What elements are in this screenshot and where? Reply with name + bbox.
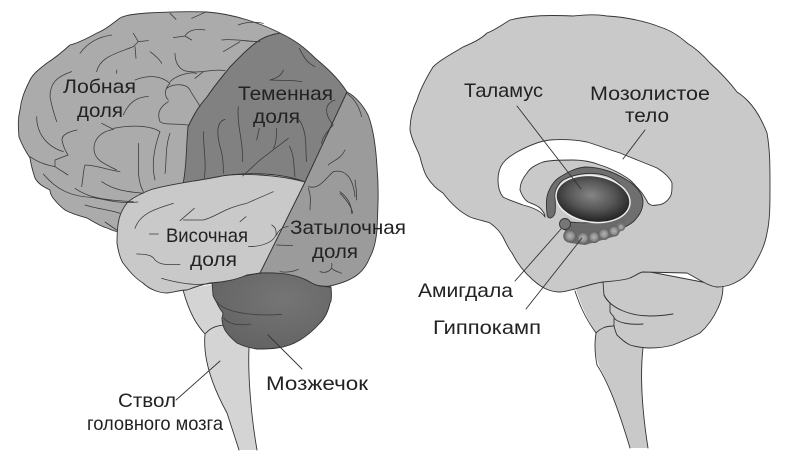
pointer: corpus callosum [623, 130, 645, 159]
cerebellum folds: right [604, 295, 673, 324]
thalamus [552, 170, 634, 228]
label: temporal lobe: доля [190, 249, 237, 271]
pointer: brainstem [176, 361, 220, 400]
label: occipital lobe: Затылочная [290, 217, 406, 239]
cerebellum: right [603, 270, 723, 348]
labels: left brain [63, 76, 406, 435]
brainstem: right [575, 280, 648, 448]
pointer: cerebellum [268, 335, 302, 369]
cerebrum outline [410, 15, 770, 292]
sulci: temporal, occipital lobes and cerebellum [135, 180, 357, 325]
brainstem: left [183, 280, 257, 450]
left brain: lateral view [18, 12, 378, 450]
label: thalamus: Таламус [464, 80, 543, 102]
label: frontal lobe: доля [77, 100, 123, 122]
labels: right brain [418, 80, 710, 339]
sulci: frontal and parietal lobes [30, 12, 362, 230]
pointer: amygdala [515, 229, 561, 281]
label: brainstem: головного мозга [87, 413, 223, 435]
frontal lobe [18, 12, 280, 232]
label: frontal lobe: Лобная [63, 76, 136, 98]
label: hippocampus: Гиппокамп [433, 317, 541, 339]
fornix [546, 167, 643, 234]
hippocampus [563, 218, 626, 245]
pointer: hippocampus [526, 238, 582, 309]
label: corpus callosum: тело [625, 105, 669, 127]
label: cerebellum: Мозжечок [266, 373, 369, 395]
pointer: thalamus [517, 106, 581, 189]
label: parietal lobe: Теменная [238, 83, 333, 105]
label: amygdala: Амигдала [418, 280, 513, 302]
label: brainstem: Ствол [118, 390, 176, 412]
amygdala [560, 218, 570, 230]
occipital lobe [260, 92, 378, 286]
right brain: medial view [410, 15, 770, 448]
parietal lobe [183, 33, 347, 184]
cerebellum: left [212, 273, 331, 349]
label: temporal lobe: Височная [166, 225, 248, 247]
corpus callosum [498, 140, 672, 217]
label: occipital lobe: доля [312, 241, 358, 263]
label: parietal lobe: доля [253, 106, 300, 128]
label: corpus callosum: Мозолистое [590, 83, 710, 105]
temporal lobe [117, 175, 305, 293]
